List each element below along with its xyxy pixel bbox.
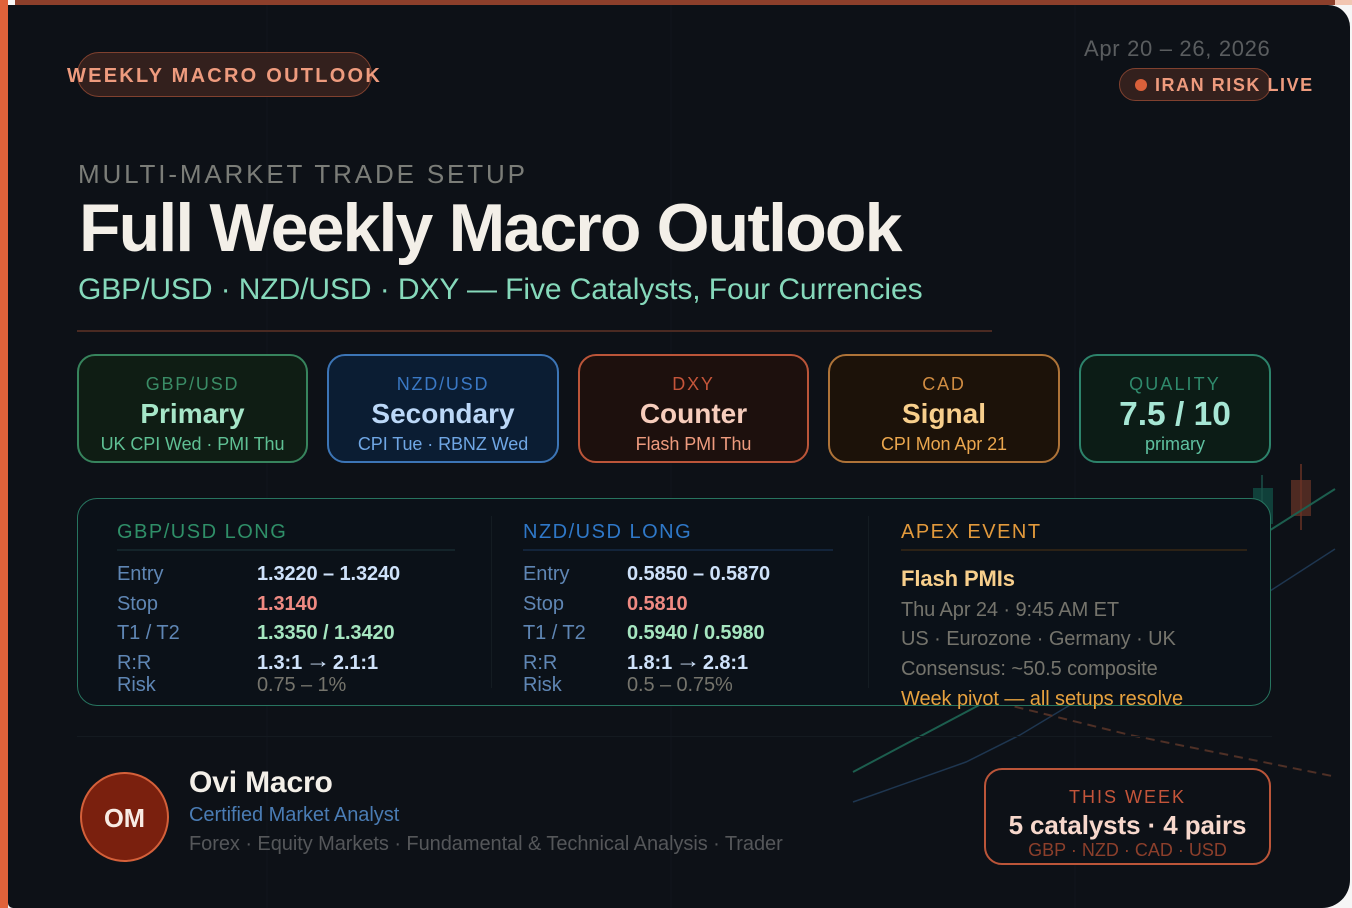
top accent bar: [15, 0, 1335, 5]
column: apex event: APEX EVENT: [901, 521, 1042, 543]
column: apex event: Thu Apr 24 · 9:45 AM ET: [901, 599, 1119, 621]
card: DXY: [578, 354, 809, 463]
card: CAD: CAD: [922, 374, 966, 394]
card: DXY: DXY: [672, 374, 715, 394]
column: GBP/USD long: 0.75 – 1%: [257, 674, 346, 696]
column: GBP/USD long: [117, 521, 455, 696]
column: NZD/USD long: NZD/USD LONG: [523, 521, 692, 543]
column: apex event: Consensus: ~50.5 composite: [901, 658, 1158, 680]
card: DXY: Counter: [640, 398, 747, 429]
avatar: [80, 772, 169, 862]
date range: Apr 20 – 26, 2026: [1084, 36, 1270, 61]
card: CAD: CPI Mon Apr 21: [881, 434, 1007, 454]
column: NZD/USD long: 0.5940 / 0.5980: [627, 622, 765, 644]
card: quality: 7.5 / 10: [1119, 396, 1231, 433]
column: GBP/USD long: R:R: [117, 652, 151, 674]
column: NZD/USD long: R:R: [523, 652, 557, 674]
column: GBP/USD long: 1.3350 / 1.3420: [257, 622, 395, 644]
card: GBP/USD: GBP/USD: [146, 374, 239, 394]
badge: weekly macro outlook: [77, 52, 372, 97]
panel: trade setups: [77, 498, 1271, 706]
card: GBP/USD: UK CPI Wed · PMI Thu: [101, 434, 284, 454]
card: DXY: Flash PMI Thu: [636, 434, 751, 454]
column: GBP/USD long: GBP/USD LONG: [117, 521, 287, 543]
avatar: OM: [104, 805, 145, 833]
card: NZD/USD: NZD/USD: [397, 374, 489, 394]
column: NZD/USD long: T1 / T2: [523, 622, 586, 644]
card: GBP/USD: [77, 354, 308, 463]
this week box: THIS WEEK: [1069, 787, 1186, 807]
card: quality: [1079, 354, 1271, 463]
column: GBP/USD long: Risk: [117, 674, 156, 696]
column: GBP/USD long: Stop: [117, 593, 158, 615]
column: GBP/USD long: Entry: [117, 563, 163, 585]
column: NZD/USD long: Risk: [523, 674, 562, 696]
author block: Ovi Macro: [189, 766, 333, 799]
column: NZD/USD long: 0.5 – 0.75%: [627, 674, 733, 696]
column: apex event: [901, 521, 1247, 710]
card: CAD: Signal: [902, 398, 986, 429]
column: NZD/USD long: Entry: [523, 563, 569, 585]
column: GBP/USD long: →: [305, 650, 330, 672]
badge: iran risk live: [1119, 68, 1271, 101]
column: apex event: US · Eurozone · Germany · UK: [901, 628, 1176, 650]
column: NZD/USD long: [523, 521, 833, 696]
left accent bar: [0, 0, 8, 908]
column: NZD/USD long: 0.5850 – 0.5870: [627, 563, 770, 585]
divider: [77, 330, 992, 332]
card: CAD: [828, 354, 1060, 463]
card: NZD/USD: [327, 354, 559, 463]
column: GBP/USD long: T1 / T2: [117, 622, 180, 644]
card: GBP/USD: Primary: [140, 398, 245, 429]
column: apex event: Week pivot — all setups resolve: [901, 688, 1183, 710]
author block: Forex · Equity Markets · Fundamental & Technical Analysis · Trader: [189, 833, 783, 855]
author block: Certified Market Analyst: [189, 804, 399, 826]
column: NZD/USD long: 0.5810: [627, 593, 688, 615]
title: Full Weekly Macro Outlook: [79, 190, 901, 266]
column: GBP/USD long: 1.3220 – 1.3240: [257, 563, 400, 585]
this week box: GBP · NZD · CAD · USD: [1028, 840, 1227, 860]
card: NZD/USD: CPI Tue · RBNZ Wed: [358, 434, 528, 454]
column: NZD/USD long: 1.8:1 2.8:1: [627, 652, 748, 674]
column divider: [868, 516, 869, 688]
author block: [189, 766, 783, 855]
column: GBP/USD long: 1.3140: [257, 593, 318, 615]
column: NZD/USD long: Stop: [523, 593, 564, 615]
column divider: [491, 516, 492, 688]
card: NZD/USD: Secondary: [371, 398, 515, 429]
column: apex event: Flash PMIs: [901, 566, 1015, 591]
subtitle: GBP/USD · NZD/USD · DXY — Five Catalysts, Four Currencies: [78, 273, 922, 306]
card: quality: QUALITY: [1129, 374, 1221, 394]
this week box: [984, 768, 1271, 865]
column: NZD/USD long: →: [675, 650, 700, 672]
card: quality: primary: [1145, 434, 1205, 454]
iran risk live text: IRAN RISK LIVE: [1155, 75, 1314, 95]
badge text: WEEKLY MACRO OUTLOOK: [67, 65, 382, 87]
column: GBP/USD long: 1.3:1 2.1:1: [257, 652, 378, 674]
live dot: [1135, 79, 1147, 91]
top right corner tint: [1335, 0, 1352, 5]
this week box: 5 catalysts · 4 pairs: [1009, 810, 1246, 840]
footer divider: [77, 736, 1272, 737]
eyebrow: MULTI-MARKET TRADE SETUP: [78, 159, 528, 189]
